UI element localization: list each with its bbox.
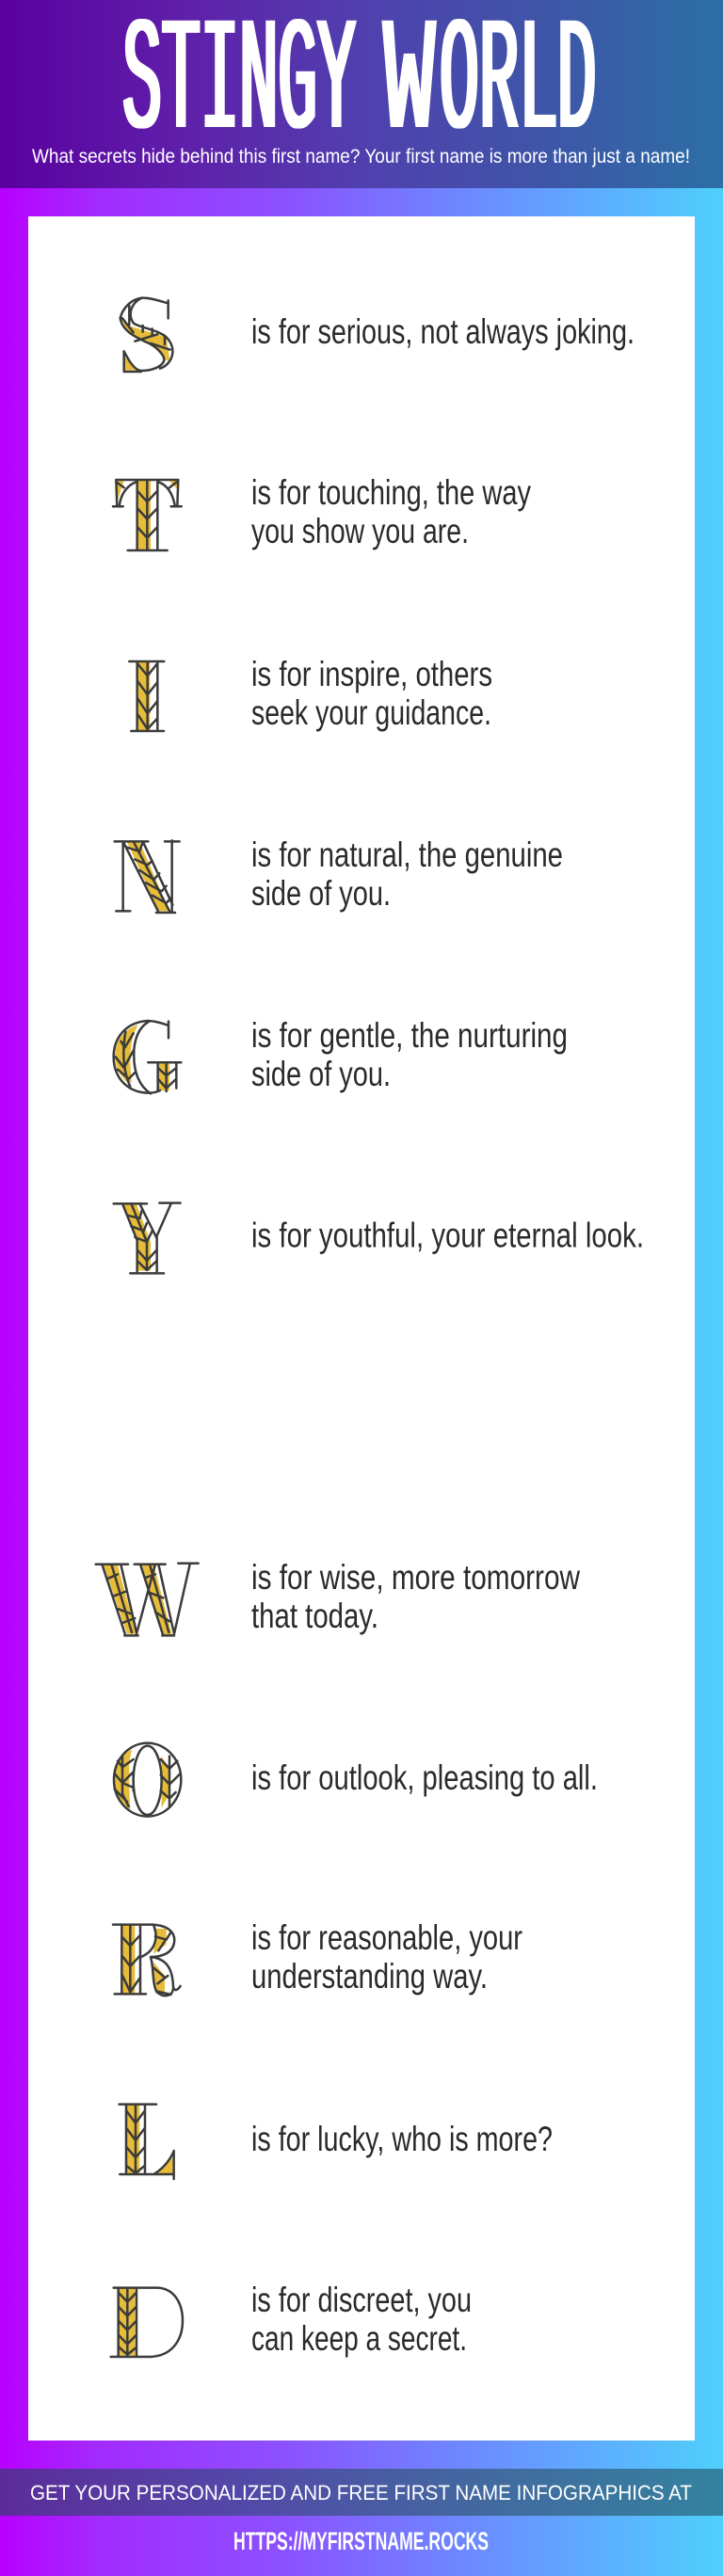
text: G: side of you.	[251, 1055, 391, 1093]
icon: letter R	[113, 1925, 181, 1996]
row: W	[96, 1558, 580, 1635]
text: W: is for wise, more tomorrow	[251, 1558, 580, 1597]
row: R	[113, 1918, 522, 1996]
text: R: understanding way.	[251, 1957, 488, 1996]
icon: letter S	[120, 298, 172, 372]
footer call to action: GET YOUR PERSONALIZED AND FREE FIRST NAME INFOGRAPHICS AT	[30, 2481, 692, 2504]
text: O: is for outlook, pleasing to all.	[251, 1758, 598, 1797]
footer url: HTTPS://MYFIRSTNAME.ROCKS	[233, 2527, 489, 2555]
row: O	[114, 1743, 598, 1817]
row: D	[111, 2281, 472, 2358]
title	[122, 0, 597, 176]
icon: letter W	[96, 1564, 199, 1635]
row: S	[120, 298, 635, 372]
footer band	[0, 2469, 723, 2516]
text: N: is for natural, the genuine	[251, 835, 563, 874]
icon: letter L	[120, 2105, 174, 2179]
icon: letter G	[114, 1021, 181, 1093]
white content panel	[28, 216, 695, 2441]
icon: letter N	[115, 840, 180, 913]
text: I: is for inspire, others	[251, 655, 492, 693]
text: I: seek your guidance.	[251, 693, 491, 732]
icon: letter T	[113, 480, 182, 550]
icon: letter I	[129, 661, 164, 731]
text: T: you show you are.	[251, 512, 469, 550]
row: L	[120, 2105, 553, 2179]
header band	[0, 0, 723, 188]
row: G	[114, 1016, 568, 1093]
row: N	[115, 835, 563, 913]
icon: letter O	[114, 1743, 181, 1817]
icon: letter D	[111, 2288, 183, 2357]
text: T: is for touching, the way	[251, 473, 531, 512]
text: D: can keep a secret.	[251, 2319, 467, 2358]
text: G: is for gentle, the nurturing	[251, 1016, 568, 1055]
row: T	[113, 473, 531, 550]
text: L: is for lucky, who is more?	[251, 2120, 553, 2158]
text: D: is for discreet, you	[251, 2281, 472, 2319]
row: I	[129, 655, 492, 732]
text: N: side of you.	[251, 874, 391, 913]
row: Y	[114, 1203, 644, 1273]
text: W: that today.	[251, 1597, 378, 1635]
icon: letter Y	[114, 1203, 181, 1273]
text: R: is for reasonable, your	[251, 1918, 522, 1957]
